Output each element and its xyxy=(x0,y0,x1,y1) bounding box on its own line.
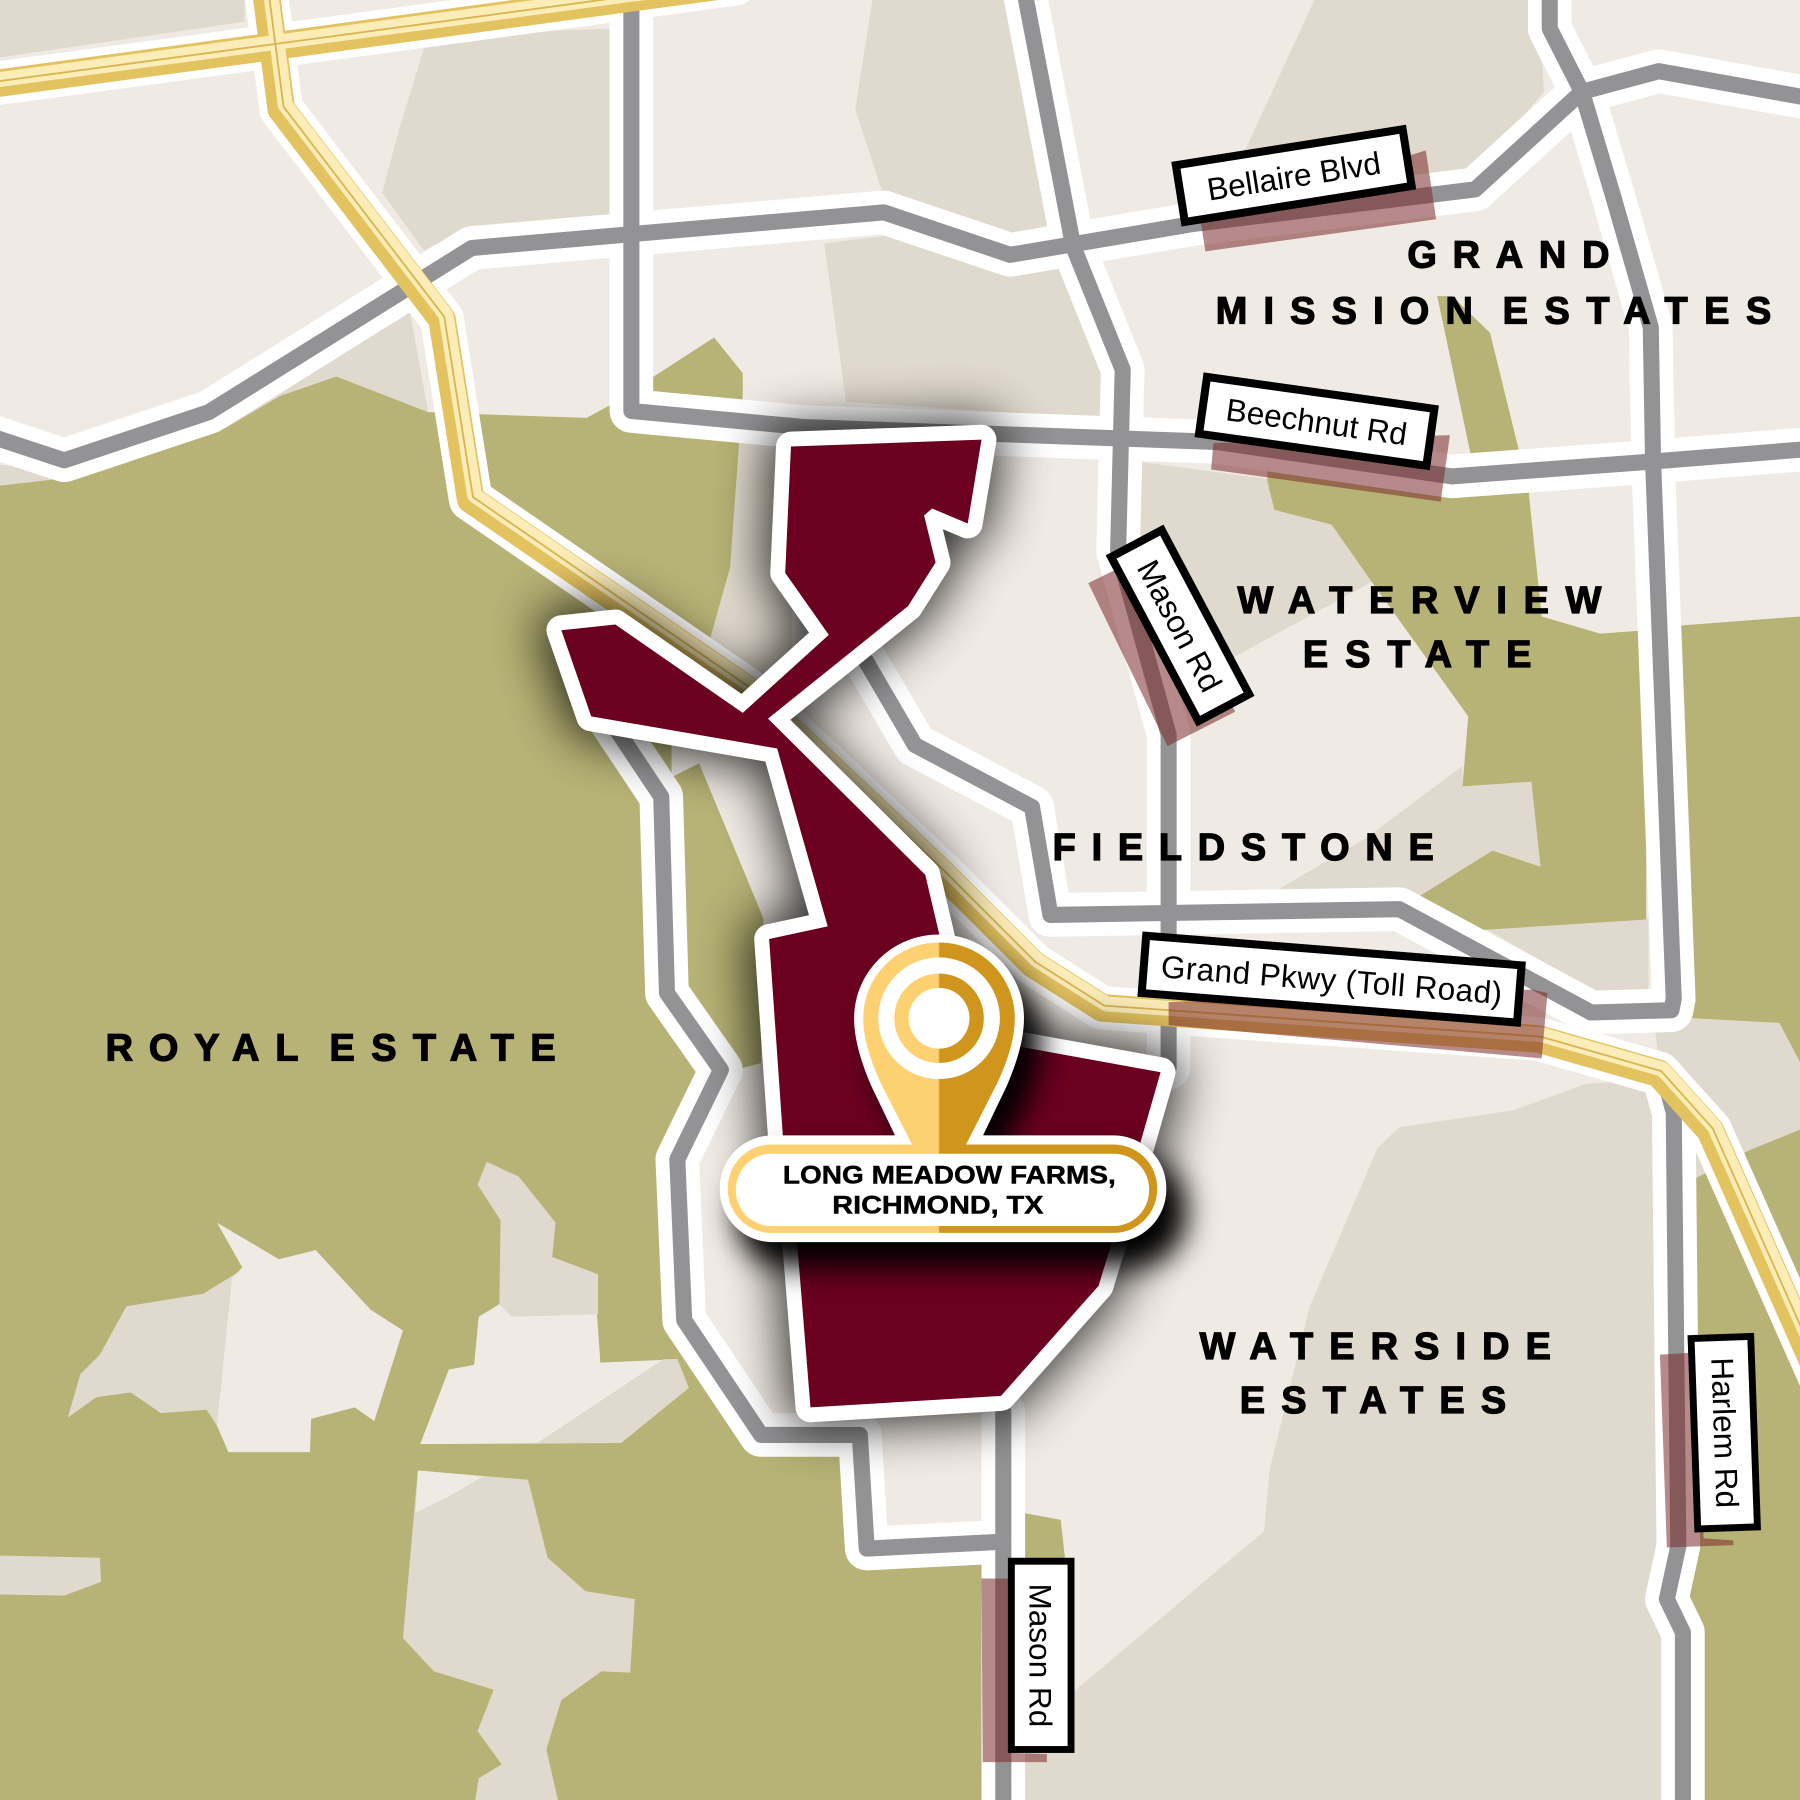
neighborhood: Grand Mission Estates: ESTATES xyxy=(1503,291,1771,333)
neighborhood: Waterside Estates: ESTATES xyxy=(1240,1380,1506,1422)
toll road highway xyxy=(0,0,1800,1389)
neighborhood: Waterside Estates xyxy=(1200,1326,1551,1422)
location label pill xyxy=(720,934,1166,1242)
neighborhood: Royal Estate xyxy=(106,1028,556,1070)
neighborhood: Grand Mission Estates: GRAND xyxy=(1407,234,1609,276)
location name line 1: LONG MEADOW FARMS, xyxy=(783,1162,1116,1190)
road label: Bellaire Blvd xyxy=(1176,129,1412,222)
pale clearings in the royal estate greenbelt xyxy=(0,1162,689,1800)
parcel: Long Meadow Farms boundary xyxy=(561,440,1161,1407)
neighborhood: Waterside Estates: WATERSIDE xyxy=(1200,1326,1551,1368)
tan patch at highway east xyxy=(1653,1016,1800,1182)
road label: Mason Rd lower: Mason Rd xyxy=(1023,1583,1059,1727)
road label: Harlem Rd xyxy=(1691,1336,1757,1529)
neighborhood: Fieldstone: FIELDSTONE xyxy=(1053,827,1434,869)
neighborhood: Royal Estate: ESTATE xyxy=(329,1028,556,1070)
neighborhood: Grand Mission Estates xyxy=(1216,234,1771,333)
road label: Grand Pkwy xyxy=(1142,936,1522,1023)
road label: Beechnut Rd: Beechnut Rd xyxy=(1224,391,1409,452)
road label: Mason Rd lower xyxy=(1011,1561,1071,1749)
location pin marker xyxy=(854,934,1024,1148)
location name line 2: RICHMOND, TX xyxy=(832,1191,1044,1219)
neighborhood: Waterview Estate: WATERVIEW xyxy=(1238,580,1602,622)
neighborhood: Grand Mission Estates: MISSION xyxy=(1216,291,1473,333)
parcel shadow xyxy=(561,440,1161,1407)
road label: Mason Rd upper xyxy=(1111,530,1249,721)
road label: Bellaire Blvd: Bellaire Blvd xyxy=(1204,145,1383,208)
neighborhood: Waterview Estate xyxy=(1238,580,1602,676)
neighborhood: Royal Estate: ROYAL xyxy=(106,1028,298,1070)
neighborhood: Waterview Estate: ESTATE xyxy=(1303,634,1531,676)
road label: Mason Rd upper: Mason Rd xyxy=(1130,554,1229,698)
road label: Grand Pkwy: Grand Pkwy (Toll Road) xyxy=(1160,948,1504,1011)
road label: Harlem Rd: Harlem Rd xyxy=(1704,1357,1746,1509)
pin and label shadow xyxy=(736,959,1187,1267)
road label: Beechnut Rd xyxy=(1199,377,1434,466)
road highlight bands xyxy=(982,150,1733,1762)
